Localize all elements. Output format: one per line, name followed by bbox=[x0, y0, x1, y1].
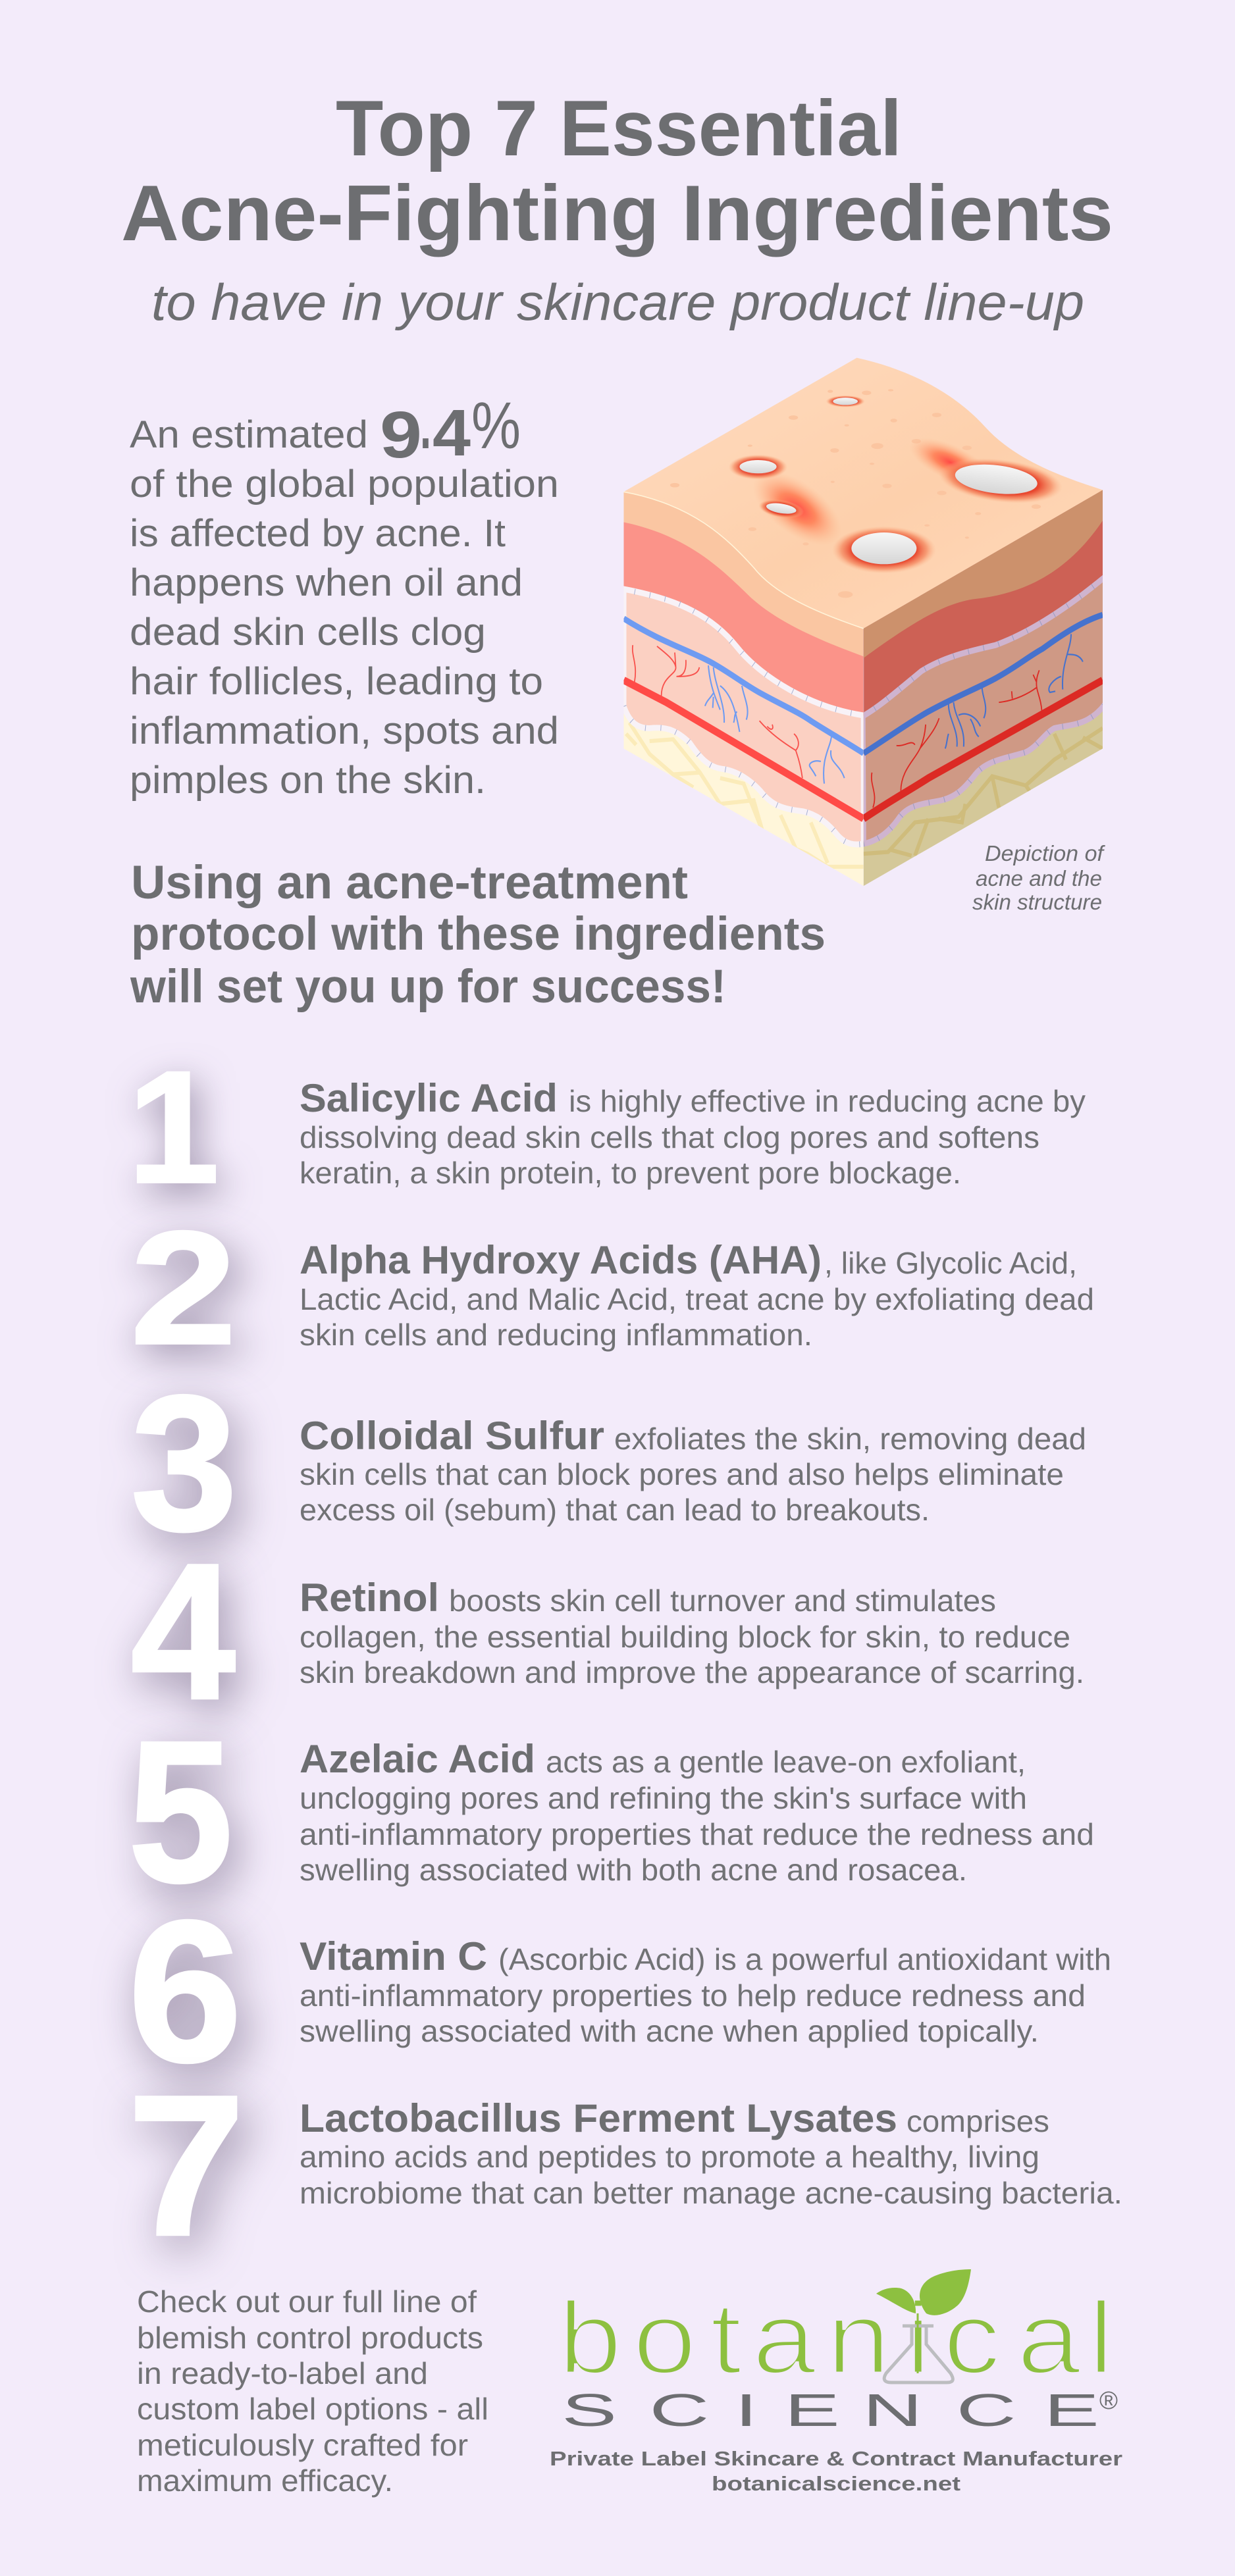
statistic: 9.4%: 4 bbox=[433, 396, 471, 470]
ingredient 5: Azelaic Acid: Azelaic Acid bbox=[300, 1737, 535, 1781]
ingredient 3: Colloidal Sulfur: excess oil (sebum) that can lead to breakouts. bbox=[300, 1493, 930, 1527]
right face of skin block bbox=[864, 490, 1103, 886]
intro text block: inflammation, spots and bbox=[130, 709, 559, 752]
ingredient 3: Colloidal Sulfur: skin cells that can block pores and also helps eliminate bbox=[300, 1457, 1064, 1491]
number 1: 1 bbox=[128, 1039, 219, 1216]
number 2: 2 bbox=[130, 1198, 236, 1378]
title bbox=[121, 84, 1113, 257]
intro text block bbox=[130, 389, 559, 802]
ingredient 7: Lactobacillus Ferment Lysates: Lactobacillus Ferment Lysates bbox=[300, 2096, 897, 2140]
ingredient 4: Retinol: skin breakdown and improve the appearance of scarring. bbox=[300, 1655, 1084, 1689]
ingredient 1: Salicylic Acid: keratin, a skin protein, to prevent pore blockage. bbox=[300, 1156, 961, 1190]
website: botanicalscience.net bbox=[712, 2472, 960, 2495]
subtitle: to have in your skincare product line-up bbox=[151, 273, 1084, 331]
ingredient 6: Vitamin C bbox=[300, 1934, 1111, 2048]
logo: botanical science bbox=[550, 2269, 1122, 2495]
ingredient 7: Lactobacillus Ferment Lysates: comprises bbox=[907, 2104, 1049, 2138]
ingredient 5: Azelaic Acid: unclogging pores and refining the skin's surface with bbox=[300, 1781, 1027, 1815]
number 6: 6 bbox=[128, 1880, 242, 2103]
ingredient 2: Alpha Hydroxy Acids: Lactic Acid, and Malic Acid, treat acne by exfoliating dead bbox=[300, 1282, 1094, 1316]
tagline: Private Label Skincare & Contract Manufacturer bbox=[550, 2447, 1122, 2470]
ingredient 4: Retinol: boosts skin cell turnover and stimulates bbox=[449, 1584, 996, 1618]
ingredient 4: Retinol bbox=[300, 1576, 1084, 1689]
illustration caption: Depiction of bbox=[985, 841, 1106, 865]
statistic: 9.4%: 9 bbox=[380, 398, 422, 472]
intro text block: happens when oil and bbox=[130, 561, 523, 604]
icon: flask bbox=[884, 2326, 953, 2383]
ingredient 3: Colloidal Sulfur: exfoliates the skin, removing dead bbox=[614, 1422, 1086, 1456]
footer call to action text: maximum efficacy. bbox=[137, 2463, 393, 2498]
intro text block: An estimated bbox=[130, 413, 368, 456]
footer call to action text bbox=[137, 2284, 488, 2498]
ingredient 5: Azelaic Acid: anti-inflammatory properties that reduce the redness and bbox=[300, 1817, 1094, 1851]
ingredient 1: Salicylic Acid: is highly effective in reducing acne by bbox=[569, 1084, 1086, 1118]
ingredient 2: Alpha Hydroxy Acids: , like Glycolic Acid, bbox=[824, 1246, 1077, 1280]
statistic: 9.4% bbox=[380, 389, 521, 472]
ingredient 3: Colloidal Sulfur: Colloidal Sulfur bbox=[300, 1414, 604, 1458]
icon: leaves bbox=[876, 2269, 971, 2315]
ingredient 6: Vitamin C: Vitamin C bbox=[300, 1934, 487, 1978]
call to action heading: will set you up for success! bbox=[130, 961, 726, 1013]
ingredient 5: Azelaic Acid: swelling associated with both acne and rosacea. bbox=[300, 1853, 967, 1887]
intro text block: pimples on the skin. bbox=[130, 759, 486, 802]
intro text block: is affected by acne. It bbox=[130, 512, 506, 555]
ingredient 4: Retinol: Retinol bbox=[300, 1576, 439, 1620]
blue capillaries, right bbox=[945, 634, 1083, 748]
ingredient 3: Colloidal Sulfur bbox=[300, 1414, 1086, 1527]
ingredient 2: Alpha Hydroxy Acids: skin cells and reducing inflammation. bbox=[300, 1318, 812, 1352]
call to action heading bbox=[130, 857, 826, 1013]
ingredient 2: Alpha Hydroxy Acids: Alpha Hydroxy Acids (AHA) bbox=[300, 1238, 822, 1282]
wordmark: science: SCIENCE bbox=[562, 2384, 1099, 2436]
call to action heading: protocol with these ingredients bbox=[131, 908, 826, 960]
ingredient 7: Lactobacillus Ferment Lysates: amino acids and peptides to promote a healthy, living bbox=[300, 2140, 1039, 2174]
blue capillaries, left bbox=[705, 665, 845, 784]
ingredient 7: Lactobacillus Ferment Lysates: microbiome that can better manage acne-causing bacteria. bbox=[300, 2176, 1122, 2210]
skin pores bbox=[670, 389, 1041, 598]
title: Acne-Fighting Ingredients bbox=[121, 169, 1113, 257]
top skin surface bbox=[623, 358, 1103, 629]
statistic: 9.4%: . bbox=[420, 389, 431, 463]
footer call to action text: custom label options - all bbox=[137, 2392, 488, 2426]
footer call to action text: blemish control products bbox=[137, 2321, 483, 2355]
ingredient 1: Salicylic Acid: dissolving dead skin cells that clog pores and softens bbox=[300, 1120, 1039, 1154]
call to action heading: Using an acne-treatment bbox=[131, 857, 688, 909]
red capillaries, right bbox=[872, 670, 1042, 808]
ingredient 2: Alpha Hydroxy Acids bbox=[300, 1238, 1094, 1352]
ingredient 1: Salicylic Acid: Salicylic Acid bbox=[300, 1076, 558, 1120]
number 4: 4 bbox=[131, 1524, 236, 1739]
ingredient 6: Vitamin C: swelling associated with acne when applied topically. bbox=[300, 2014, 1039, 2048]
illustration caption bbox=[972, 841, 1106, 914]
intro text block: dead skin cells clog bbox=[130, 611, 486, 654]
footer call to action text: Check out our full line of bbox=[137, 2284, 477, 2319]
white pimple heads bbox=[739, 398, 1039, 564]
number 7: 7 bbox=[128, 2055, 245, 2277]
wordmark: botanical: botanical bbox=[558, 2281, 1114, 2396]
illustration caption: acne and the bbox=[976, 866, 1102, 890]
intro text block: hair follicles, leading to bbox=[130, 660, 543, 703]
flask stem bbox=[916, 2313, 919, 2373]
title: Top 7 Essential bbox=[336, 84, 902, 172]
left face of skin block bbox=[624, 492, 864, 886]
ingredient 7: Lactobacillus Ferment Lysates bbox=[300, 2096, 1122, 2210]
red capillaries, left bbox=[633, 645, 802, 778]
intro text block: of the global population bbox=[130, 463, 559, 505]
ingredient 4: Retinol: collagen, the essential building block for skin, to reduce bbox=[300, 1620, 1070, 1654]
number 3: 3 bbox=[131, 1356, 237, 1570]
number 5: 5 bbox=[128, 1699, 233, 1924]
footer call to action text: meticulously crafted for bbox=[137, 2428, 468, 2462]
inflamed redness bbox=[729, 396, 1064, 573]
ingredient 6: Vitamin C: anti-inflammatory properties to help reduce redness and bbox=[300, 1978, 1086, 2013]
illustration caption: skin structure bbox=[972, 890, 1102, 914]
ingredient 6: Vitamin C: (Ascorbic Acid) is a powerful antioxidant with bbox=[498, 1942, 1111, 1976]
statistic: 9.4%: % bbox=[471, 389, 521, 463]
registered mark: ® bbox=[1099, 2387, 1118, 2415]
ingredient 5: Azelaic Acid bbox=[300, 1737, 1094, 1887]
skin cube illustration bbox=[619, 358, 1107, 896]
ingredient 5: Azelaic Acid: acts as a gentle leave-on exfoliant, bbox=[546, 1745, 1026, 1779]
ingredient 1: Salicylic Acid bbox=[300, 1076, 1086, 1190]
footer call to action text: in ready-to-label and bbox=[137, 2356, 428, 2390]
